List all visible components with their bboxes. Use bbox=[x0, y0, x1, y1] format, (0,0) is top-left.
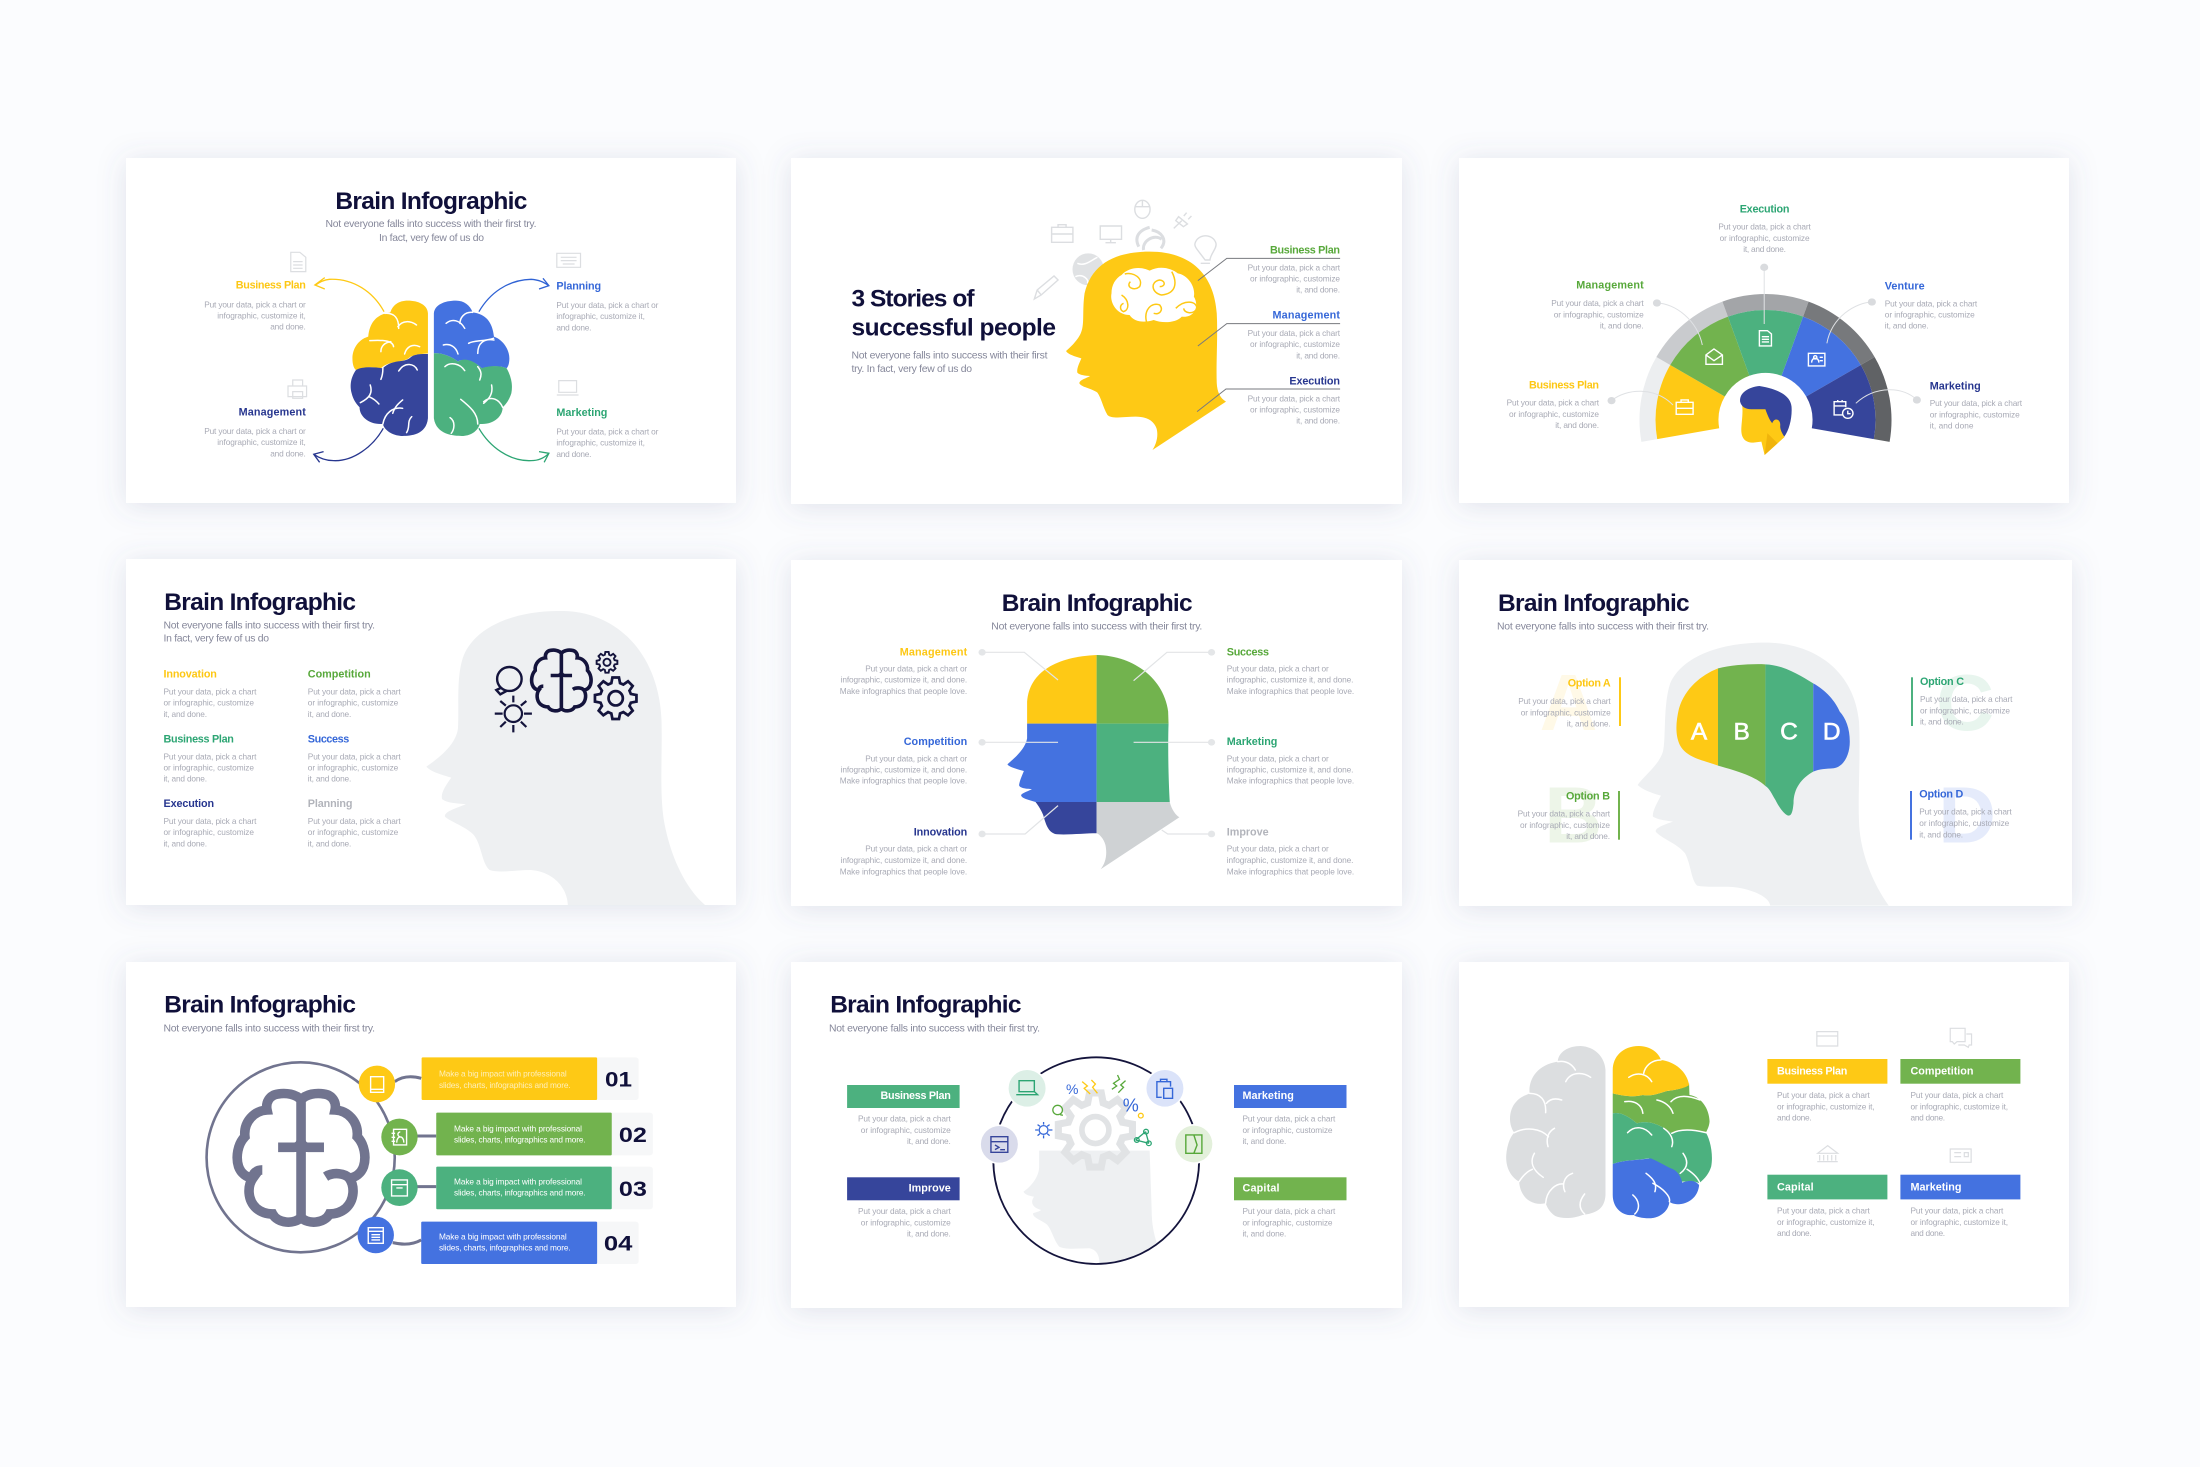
panel: grey head with six items bbox=[126, 559, 736, 905]
bubble: clipboard bbox=[1145, 1068, 1185, 1108]
item: innovation: it, and done. bbox=[164, 709, 207, 719]
segmented head bbox=[978, 649, 1215, 869]
option C: Option C bbox=[1920, 676, 1964, 688]
text block: competition: Put your data, pick a chart or bbox=[865, 753, 967, 763]
row 03 text: 03 bbox=[619, 1178, 647, 1201]
text block: innovation: infographic, customize it, and done. bbox=[841, 855, 967, 865]
text block: management: Management bbox=[239, 406, 306, 418]
brain illustration bbox=[1506, 1046, 1712, 1218]
text block: marketing bbox=[556, 407, 659, 459]
subtitle bbox=[164, 620, 375, 645]
text block: management: infographic, customize it, and done. bbox=[841, 675, 967, 685]
brain letters bbox=[1691, 718, 1841, 745]
item: execution: Put your data, pick a chart bbox=[164, 816, 257, 826]
text block: innovation: Innovation bbox=[914, 827, 967, 839]
text block: execution: it, and done. bbox=[1743, 244, 1786, 254]
row 03 text: slides, charts, infographics and more. bbox=[454, 1188, 586, 1198]
icon: card bbox=[1817, 1032, 1838, 1046]
text block: execution: Execution bbox=[1289, 375, 1340, 387]
text block: business plan bbox=[1507, 380, 1600, 430]
icon: id bbox=[1950, 1149, 1971, 1162]
text block: competition bbox=[840, 736, 967, 786]
leader dots bbox=[1608, 264, 1921, 404]
row 02 text: slides, charts, infographics and more. bbox=[454, 1135, 586, 1145]
card: business plan: or infographic, customize it, bbox=[1777, 1101, 1875, 1111]
ghost letters: B bbox=[1544, 770, 1602, 859]
card: marketing: Put your data, pick a chart bbox=[1910, 1206, 2004, 1216]
icon circle: green bbox=[381, 1119, 418, 1155]
segment icons, head and leaders bbox=[1608, 264, 1921, 455]
option A: Option A bbox=[1568, 678, 1611, 690]
text block: marketing: Put your data, pick a chart bbox=[1930, 398, 2023, 408]
text block: marketing bbox=[1227, 736, 1354, 786]
ghost letters bbox=[1540, 658, 1996, 859]
card: business plan: Business Plan bbox=[1777, 1066, 1847, 1078]
brain in head bbox=[1111, 268, 1197, 322]
subtitle: Not everyone falls into success with their first try. bbox=[326, 219, 536, 230]
option B bbox=[1518, 791, 1620, 841]
text block: execution: or infographic, customize bbox=[1250, 405, 1340, 415]
item: business plan bbox=[164, 733, 257, 784]
icons bbox=[288, 252, 581, 398]
text block: business plan: Put your data, pick a chart bbox=[1248, 262, 1341, 272]
option D: it, and done. bbox=[1919, 829, 1963, 839]
item: competition: it, and done. bbox=[308, 709, 351, 719]
title bbox=[852, 286, 1056, 341]
text block: execution: it, and done. bbox=[1296, 416, 1340, 426]
card: business plan: and done. bbox=[1777, 1112, 1812, 1122]
text block: success: infographic, customize it, and done. bbox=[1227, 675, 1353, 685]
ghost letters: D bbox=[1938, 770, 1996, 859]
text block: management bbox=[1551, 280, 1644, 330]
option D: Option D bbox=[1919, 789, 1963, 801]
item: success: it, and done. bbox=[308, 774, 351, 784]
percent symbols bbox=[1066, 1081, 1139, 1116]
arrow: management bbox=[314, 428, 383, 462]
text block: innovation: Make infographics that people love. bbox=[840, 866, 967, 876]
panel: four-quadrant brain bbox=[126, 158, 736, 503]
bubble: terminal bbox=[979, 1124, 1019, 1164]
text block: management: and done. bbox=[270, 448, 306, 458]
subtitle: Not everyone falls into success with their first try. bbox=[1497, 622, 1709, 633]
text block: competition: Make infographics that people love. bbox=[840, 776, 967, 786]
icon circle: blue bbox=[358, 1217, 394, 1253]
item: planning: it, and done. bbox=[308, 838, 351, 848]
head icon bbox=[1740, 386, 1792, 455]
label: capital bbox=[1234, 1177, 1346, 1238]
text block: execution: Put your data, pick a chart bbox=[1248, 393, 1341, 403]
text block: planning: Put your data, pick a chart or bbox=[556, 300, 659, 310]
text block: marketing: infographic, customize it, bbox=[556, 438, 645, 448]
panel: options A to D bbox=[1459, 560, 2072, 906]
leader dots bbox=[978, 649, 1215, 837]
item: business plan: Put your data, pick a chart bbox=[164, 751, 257, 761]
label: marketing bbox=[1234, 1085, 1346, 1146]
arrows bbox=[314, 278, 549, 462]
text block: management: Put your data, pick a chart or bbox=[204, 426, 306, 436]
text block: business plan: Business Plan bbox=[236, 280, 306, 292]
subtitle bbox=[326, 219, 536, 244]
title: Brain Infographic bbox=[164, 992, 356, 1019]
item: success: Put your data, pick a chart bbox=[308, 751, 401, 761]
percent symbols: % bbox=[1123, 1096, 1139, 1116]
text block: success bbox=[1227, 646, 1354, 696]
coloured brain bbox=[1676, 664, 1850, 816]
item: planning: or infographic, customize bbox=[308, 827, 399, 837]
bubble: laptop bbox=[1007, 1068, 1047, 1108]
ghost letters: C bbox=[1936, 658, 1994, 747]
option A: Put your data, pick a chart bbox=[1518, 696, 1611, 706]
label: improve: Put your data, pick a chart bbox=[858, 1206, 951, 1216]
option B: it, and done. bbox=[1566, 831, 1610, 841]
label: improve bbox=[847, 1177, 960, 1238]
subtitle: Not everyone falls into success with their first try. bbox=[991, 622, 1202, 633]
option D: or infographic, customize bbox=[1919, 818, 2010, 828]
item: execution: Execution bbox=[164, 798, 214, 810]
text block: business plan: and done. bbox=[270, 322, 306, 332]
row 04 text bbox=[439, 1231, 633, 1256]
text block: improve bbox=[1227, 827, 1354, 876]
icon: bank bbox=[1817, 1146, 1838, 1162]
item: innovation: Put your data, pick a chart bbox=[164, 687, 257, 697]
text block: business plan: Put your data, pick a chart bbox=[1507, 398, 1600, 408]
rows bbox=[358, 1057, 653, 1264]
item: business plan: it, and done. bbox=[164, 774, 207, 784]
text block: planning bbox=[556, 280, 659, 332]
title: Brain Infographic bbox=[335, 188, 527, 215]
text block: management: Management bbox=[900, 646, 968, 658]
icon: light bulb bbox=[496, 667, 522, 694]
text block: management bbox=[840, 646, 968, 696]
option D: Put your data, pick a chart bbox=[1919, 807, 2012, 817]
option A bbox=[1518, 677, 1621, 728]
row 03 text bbox=[454, 1177, 647, 1201]
grey icons bbox=[1817, 1028, 1972, 1162]
label: improve: it, and done. bbox=[907, 1228, 951, 1238]
option B: Option B bbox=[1566, 791, 1610, 803]
text block: marketing: or infographic, customize bbox=[1930, 409, 2020, 419]
text block: business plan: it, and done. bbox=[1555, 420, 1599, 430]
icon: id card bbox=[1808, 353, 1825, 366]
text block: marketing: Put your data, pick a chart or bbox=[556, 427, 659, 437]
row 01 text: 01 bbox=[605, 1069, 632, 1092]
text block: venture: or infographic, customize bbox=[1885, 310, 1975, 320]
label: marketing: or infographic, customize bbox=[1242, 1125, 1333, 1135]
brain letters: A bbox=[1691, 718, 1708, 745]
label: capital: Put your data, pick a chart bbox=[1242, 1206, 1336, 1216]
icon: chat bbox=[1950, 1028, 1972, 1047]
text block: venture: it, and done. bbox=[1885, 321, 1929, 331]
text block: planning: Planning bbox=[556, 280, 601, 292]
option D bbox=[1910, 789, 2012, 840]
grey head silhouette bbox=[426, 611, 705, 905]
panel: semicircle segments bbox=[1459, 158, 2069, 503]
brain illustration bbox=[351, 301, 512, 436]
row 04 bar bbox=[421, 1222, 639, 1264]
text block: improve: Make infographics that people love. bbox=[1227, 866, 1354, 876]
brain in circle bbox=[207, 1062, 436, 1252]
text block: management: it, and done. bbox=[1600, 320, 1644, 330]
text block: execution bbox=[1248, 375, 1341, 426]
card: marketing: and done. bbox=[1910, 1228, 1945, 1238]
card: capital: Capital bbox=[1777, 1181, 1814, 1193]
label: marketing: Marketing bbox=[1242, 1090, 1294, 1102]
card: marketing: or infographic, customize it, bbox=[1910, 1217, 2008, 1227]
connectors bbox=[393, 1077, 436, 1244]
text block: marketing: infographic, customize it, and done. bbox=[1227, 764, 1353, 774]
option B: or infographic, customize bbox=[1520, 820, 1610, 830]
item: competition: or infographic, customize bbox=[308, 698, 399, 708]
text block: marketing: Marketing bbox=[556, 407, 607, 419]
label: business plan bbox=[847, 1085, 960, 1146]
text block: marketing: it, and done bbox=[1930, 420, 1974, 430]
small symbols bbox=[1035, 1075, 1151, 1146]
row 01 text: Make a big impact with professional bbox=[439, 1069, 567, 1079]
item: business plan: Business Plan bbox=[164, 733, 234, 745]
icon: briefcase bbox=[1676, 400, 1693, 414]
arrow: business plan bbox=[315, 278, 384, 312]
item: success: Success bbox=[308, 733, 349, 745]
title: Brain Infographic bbox=[1498, 590, 1690, 617]
item: business plan: or infographic, customize bbox=[164, 762, 254, 772]
label: capital: it, and done. bbox=[1242, 1228, 1286, 1238]
brain letters: D bbox=[1823, 718, 1841, 745]
label: marketing: it, and done. bbox=[1242, 1136, 1286, 1146]
text block: business plan bbox=[1248, 244, 1341, 295]
item: success bbox=[308, 733, 401, 784]
label: capital: Capital bbox=[1242, 1182, 1280, 1194]
row 03 text: Make a big impact with professional bbox=[454, 1177, 582, 1187]
text block: marketing: Put your data, pick a chart or bbox=[1227, 753, 1329, 763]
row 04 text: slides, charts, infographics and more. bbox=[439, 1242, 571, 1252]
row 02 text: Make a big impact with professional bbox=[454, 1124, 582, 1134]
text block: business plan: or infographic, customize bbox=[1250, 274, 1340, 284]
card: competition: and done. bbox=[1910, 1112, 1945, 1122]
card: marketing bbox=[1900, 1175, 2020, 1238]
text block: business plan: it, and done. bbox=[1296, 285, 1340, 295]
text block: marketing: and done. bbox=[556, 449, 591, 459]
ghost letters: A bbox=[1540, 658, 1597, 747]
item: execution: or infographic, customize bbox=[164, 827, 254, 837]
card: competition: or infographic, customize it, bbox=[1910, 1101, 2008, 1111]
text block: venture: Venture bbox=[1885, 280, 1925, 292]
option B: Put your data, pick a chart bbox=[1518, 809, 1611, 819]
label: business plan: Business Plan bbox=[880, 1090, 951, 1102]
label: business plan: it, and done. bbox=[907, 1136, 951, 1146]
semicircle chart bbox=[1639, 294, 1892, 442]
title: Brain Infographic bbox=[1002, 590, 1193, 617]
card: business plan: Put your data, pick a chart bbox=[1777, 1090, 1870, 1100]
panel: head quadrants bbox=[791, 560, 1402, 906]
text block: management: infographic, customize it, bbox=[217, 437, 306, 447]
leader lines bbox=[1197, 258, 1340, 412]
icon: sun bbox=[495, 696, 532, 732]
text block: improve: infographic, customize it, and done. bbox=[1227, 855, 1353, 865]
option C: or infographic, customize bbox=[1920, 705, 2010, 715]
text block: management: Management bbox=[1576, 280, 1644, 292]
text block: management bbox=[204, 406, 306, 458]
card: business plan bbox=[1767, 1059, 1887, 1122]
text block: marketing: Marketing bbox=[1227, 736, 1277, 748]
percent symbols: % bbox=[1066, 1081, 1078, 1097]
item: success: or infographic, customize bbox=[308, 762, 399, 772]
text block: marketing: Make infographics that people love. bbox=[1227, 776, 1354, 786]
item: planning: Planning bbox=[308, 798, 352, 810]
row 02 text bbox=[454, 1124, 647, 1147]
text block: execution: Execution bbox=[1740, 204, 1790, 216]
arrow: marketing bbox=[479, 428, 549, 462]
subtitle: In fact, very few of us do bbox=[164, 634, 269, 645]
brain letters: B bbox=[1734, 718, 1750, 745]
title: Brain Infographic bbox=[164, 589, 356, 616]
icon bubbles bbox=[979, 1068, 1214, 1164]
text block: business plan: infographic, customize it, bbox=[217, 310, 306, 320]
item: innovation bbox=[164, 668, 257, 719]
text block: innovation bbox=[840, 827, 967, 876]
panel: head with gear in circle bbox=[791, 962, 1402, 1308]
panel: numbered list with brain bbox=[126, 962, 736, 1307]
item: execution: it, and done. bbox=[164, 838, 207, 848]
title: successful people bbox=[852, 314, 1056, 341]
leader lines bbox=[1612, 267, 1917, 405]
label: capital: or infographic, customize bbox=[1242, 1217, 1333, 1227]
arrow: planning bbox=[479, 278, 549, 312]
text block: execution: or infographic, customize bbox=[1720, 233, 1810, 243]
text block: management: Put your data, pick a chart bbox=[1248, 328, 1341, 338]
label: improve: Improve bbox=[909, 1182, 951, 1194]
brain letters: C bbox=[1780, 718, 1798, 745]
icon: brain outline bbox=[532, 650, 591, 711]
text block: marketing bbox=[1930, 380, 2023, 430]
text block: planning: and done. bbox=[556, 322, 591, 332]
item: competition: Competition bbox=[308, 668, 371, 680]
text block: planning: infographic, customize it, bbox=[556, 311, 645, 321]
text block: improve: Put your data, pick a chart or bbox=[1227, 844, 1329, 854]
text block: execution bbox=[1718, 204, 1811, 254]
text block: business plan: Put your data, pick a chart or bbox=[204, 299, 306, 309]
text block: management: Put your data, pick a chart or bbox=[865, 664, 967, 674]
text block: execution: Put your data, pick a chart bbox=[1718, 222, 1811, 232]
title: 3 Stories of bbox=[852, 286, 975, 313]
text block: management: or infographic, customize bbox=[1250, 339, 1340, 349]
item: competition: Put your data, pick a chart bbox=[308, 687, 401, 697]
item: innovation: or infographic, customize bbox=[164, 698, 254, 708]
grey head silhouette bbox=[1638, 643, 1889, 906]
card: marketing: Marketing bbox=[1910, 1181, 1962, 1193]
item: execution bbox=[164, 798, 257, 848]
text block: business plan: Business Plan bbox=[1529, 380, 1599, 392]
text block: innovation: Put your data, pick a chart or bbox=[865, 844, 967, 854]
subtitle: In fact, very few of us do bbox=[379, 233, 484, 244]
text block: management: Management bbox=[1272, 310, 1340, 322]
icon: calendar clock bbox=[1834, 400, 1853, 418]
option A: it, and done. bbox=[1567, 718, 1611, 728]
label: business plan: or infographic, customize bbox=[861, 1125, 951, 1135]
card: competition: Put your data, pick a chart bbox=[1910, 1090, 2004, 1100]
item: planning: Put your data, pick a chart bbox=[308, 816, 401, 826]
label: improve: or infographic, customize bbox=[861, 1217, 951, 1227]
text block: management: Make infographics that people love. bbox=[840, 686, 967, 696]
text block: marketing: Marketing bbox=[1930, 380, 1981, 392]
leader lines bbox=[982, 652, 1212, 834]
row 04 text: Make a big impact with professional bbox=[439, 1231, 567, 1241]
option C: Put your data, pick a chart bbox=[1920, 694, 2013, 704]
card: competition: Competition bbox=[1910, 1066, 1974, 1078]
bubble: map bbox=[1174, 1124, 1214, 1164]
text block: success: Put your data, pick a chart or bbox=[1227, 664, 1329, 674]
text block: venture bbox=[1885, 280, 1978, 331]
label: business plan: Put your data, pick a chart bbox=[858, 1114, 951, 1124]
item: competition bbox=[308, 668, 401, 719]
text block: management: Put your data, pick a chart bbox=[1551, 298, 1644, 308]
card: capital: or infographic, customize it, bbox=[1777, 1217, 1875, 1227]
row 01 bar bbox=[422, 1057, 639, 1100]
option C: it, and done. bbox=[1920, 716, 1964, 726]
card: capital: Put your data, pick a chart bbox=[1777, 1206, 1870, 1216]
row 01 text bbox=[439, 1069, 632, 1092]
label: marketing: Put your data, pick a chart bbox=[1242, 1114, 1336, 1124]
icon: envelope bbox=[1706, 349, 1722, 364]
row 04 text: 04 bbox=[604, 1233, 633, 1256]
text block: management: it, and done. bbox=[1296, 350, 1340, 360]
panel: half grey brain with cards bbox=[1459, 962, 2069, 1307]
panel: 3 stories head bbox=[791, 158, 1402, 504]
card: competition bbox=[1900, 1059, 2020, 1122]
text block: competition: Competition bbox=[904, 736, 967, 748]
text block: business plan bbox=[204, 280, 306, 332]
option A: or infographic, customize bbox=[1521, 707, 1611, 717]
ellipse and head bbox=[993, 1057, 1199, 1264]
text block: improve: Improve bbox=[1227, 827, 1269, 839]
subtitle: Not everyone falls into success with their first try. bbox=[164, 1023, 375, 1034]
item: planning bbox=[308, 798, 401, 848]
subtitle: Not everyone falls into success with their first bbox=[852, 351, 1048, 362]
icon: small gear bbox=[597, 652, 617, 673]
subtitle bbox=[852, 351, 1048, 375]
row 01 text: slides, charts, infographics and more. bbox=[439, 1080, 571, 1090]
title: Brain Infographic bbox=[830, 992, 1022, 1019]
yellow head bbox=[1066, 252, 1340, 450]
text block: competition: infographic, customize it, and done. bbox=[841, 764, 967, 774]
text block: success: Success bbox=[1227, 646, 1269, 658]
grey icons around head bbox=[1034, 200, 1216, 299]
icon circle: teal bbox=[381, 1169, 418, 1206]
text block: venture: Put your data, pick a chart bbox=[1885, 298, 1978, 308]
card: capital: and done. bbox=[1777, 1228, 1812, 1238]
icon circle: yellow bbox=[359, 1066, 395, 1102]
text block: management: or infographic, customize bbox=[1554, 309, 1644, 319]
subtitle: try. In fact, very few of us do bbox=[852, 364, 972, 375]
subtitle: Not everyone falls into success with their first try. bbox=[164, 620, 375, 631]
icon: large gear bbox=[595, 678, 636, 719]
card: capital bbox=[1767, 1175, 1887, 1238]
item: innovation: Innovation bbox=[164, 668, 217, 680]
subtitle: Not everyone falls into success with their first try. bbox=[829, 1023, 1040, 1034]
text block: business plan: or infographic, customize bbox=[1509, 409, 1599, 419]
option C bbox=[1911, 676, 2013, 726]
text block: success: Make infographics that people love. bbox=[1227, 686, 1354, 696]
icon: document bbox=[1759, 331, 1771, 346]
row 02 text: 02 bbox=[619, 1124, 647, 1147]
row 02 bar bbox=[436, 1113, 653, 1155]
row 03 bar bbox=[436, 1167, 653, 1209]
text block: business plan: Business Plan bbox=[1270, 244, 1340, 256]
icon: gear bbox=[1058, 1093, 1132, 1167]
text block: management bbox=[1248, 310, 1341, 360]
